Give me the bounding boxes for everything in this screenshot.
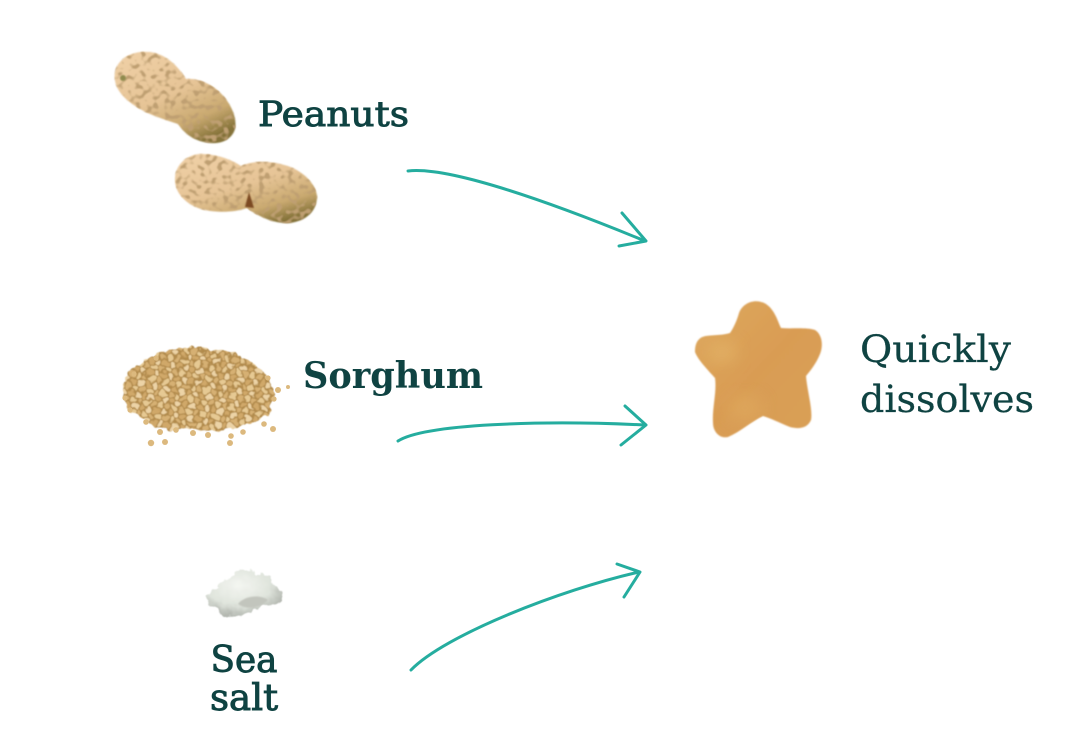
icon: sea salt [207, 569, 283, 616]
arrow: sea salt to star [411, 564, 640, 670]
label: Peanuts: Peanuts [258, 95, 409, 135]
label: Quickly dissolves: dissolves [860, 378, 1034, 421]
label: Sorghum: Sorghum [303, 355, 483, 397]
label: Sea salt [210, 640, 279, 719]
icon: peanut top [115, 52, 236, 143]
label: Quickly dissolves: Quickly [860, 328, 1011, 371]
label: Quickly dissolves [860, 328, 1034, 421]
label: Sea salt: Sea [210, 640, 278, 681]
icon: sorghum pile [122, 348, 290, 446]
arrow: peanuts to star [408, 171, 646, 246]
arrow: sorghum to star [398, 406, 646, 445]
icon: star puff [695, 301, 822, 437]
icon: peanut bottom [175, 154, 317, 223]
label: Sea salt: salt [210, 678, 279, 719]
